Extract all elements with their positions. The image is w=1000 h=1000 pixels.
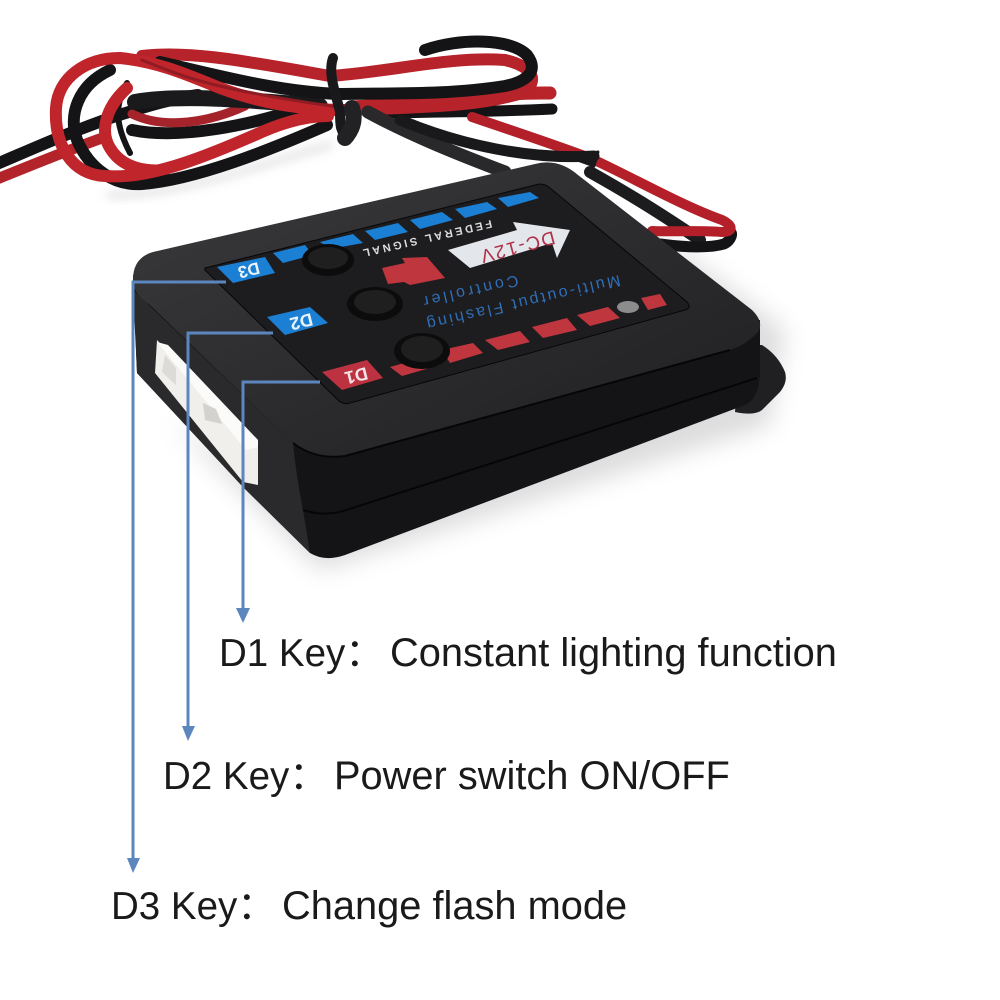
logo bbox=[382, 257, 445, 285]
D2 leader arrow bbox=[182, 333, 273, 741]
upper black wire bbox=[160, 42, 532, 94]
arrow DC-12V bbox=[448, 222, 570, 268]
inner loops bbox=[105, 83, 320, 170]
D2 badge bbox=[267, 307, 328, 335]
wire tail bbox=[0, 95, 198, 181]
blue LED markers bbox=[273, 192, 539, 263]
D3 badge: D3 bbox=[236, 258, 262, 282]
control panel label bbox=[205, 184, 689, 404]
button D2 bbox=[347, 287, 403, 321]
connector bbox=[155, 340, 258, 485]
arrow DC-12V: DC-12V bbox=[478, 226, 557, 266]
black lead to device bbox=[590, 172, 732, 247]
indicator LED bbox=[617, 301, 639, 313]
device body bbox=[133, 162, 760, 558]
button D3 bbox=[302, 244, 354, 276]
D1 leader arrow bbox=[236, 382, 320, 623]
main red wire bbox=[56, 58, 344, 176]
upper red wire bbox=[142, 54, 532, 110]
tie and black sleeve bbox=[331, 58, 598, 172]
red lead to device bbox=[472, 117, 731, 232]
red LED markers bbox=[390, 294, 667, 376]
D2 description: D2 Key： bbox=[163, 755, 328, 798]
button D1 bbox=[394, 333, 450, 369]
top face bbox=[133, 162, 760, 456]
D3 description: Change flash mode bbox=[282, 884, 627, 928]
D3 badge bbox=[217, 257, 275, 283]
D1 badge bbox=[322, 360, 383, 390]
D3 description: D3 Key： bbox=[111, 885, 276, 928]
mounting tab bbox=[735, 345, 786, 414]
Controller text: Controller bbox=[421, 271, 520, 310]
FEDERAL SIGNAL text: FEDERAL SIGNAL bbox=[361, 217, 493, 259]
D1 description: D1 Key： bbox=[219, 632, 384, 675]
Multi-output Flashing text: Multi-output Flashing bbox=[425, 271, 622, 332]
D1 badge: D1 bbox=[343, 363, 370, 388]
left side band bbox=[133, 290, 310, 553]
seams bbox=[293, 350, 757, 514]
D2 badge: D2 bbox=[288, 309, 315, 334]
black right loop wires bbox=[352, 93, 552, 113]
D3 leader arrow bbox=[127, 282, 226, 873]
drop shadow under device bbox=[170, 220, 785, 570]
body side bbox=[133, 275, 760, 558]
D2 description: Power switch ON/OFF bbox=[334, 754, 730, 798]
D1 description: Constant lighting function bbox=[390, 631, 837, 675]
black lower wire bbox=[74, 70, 327, 184]
wire bundle bbox=[0, 42, 732, 247]
